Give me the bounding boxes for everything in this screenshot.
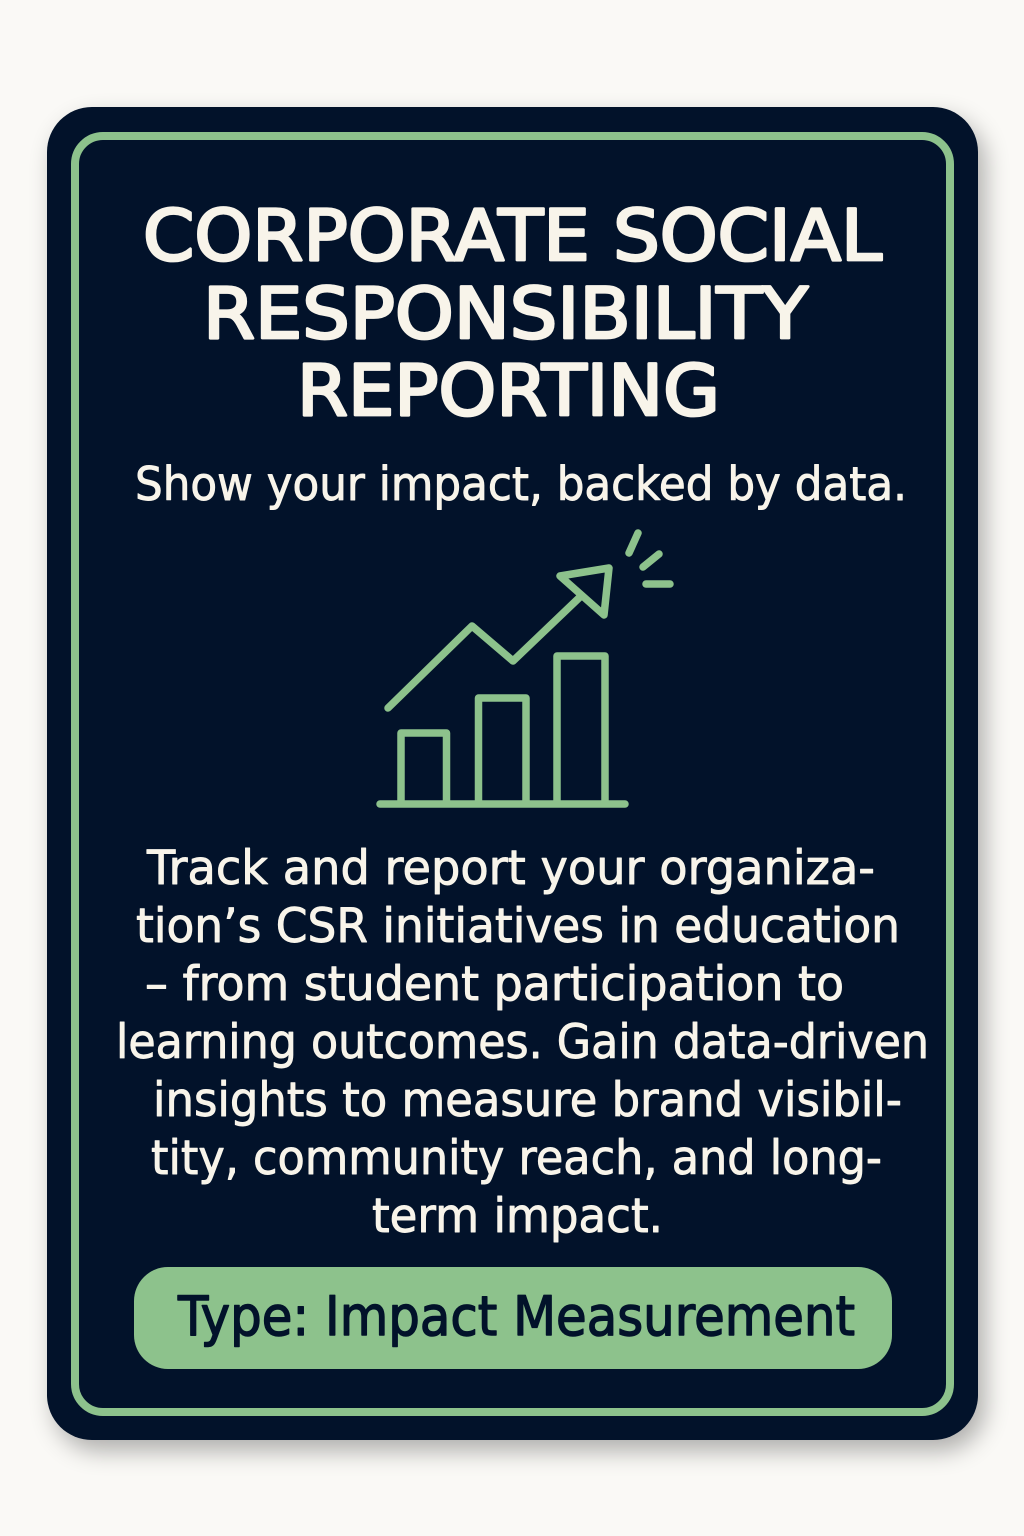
- panel: card: [47, 107, 978, 1440]
- body text: [116, 841, 929, 1244]
- badge: type: Type: Impact Measurement: [177, 1285, 855, 1348]
- title: RESPONSIBILITY: [203, 273, 808, 355]
- icon: growth chart with arrow: [380, 533, 670, 804]
- body text: tion’s CSR initiatives in education: [136, 899, 900, 954]
- badge: type: [134, 1267, 892, 1369]
- body text: insights to measure brand visibil-: [153, 1073, 902, 1128]
- title: CORPORATE SOCIAL: [143, 195, 882, 277]
- body text: – from student participation to: [145, 957, 844, 1012]
- subtitle: Show your impact, backed by data.: [135, 457, 907, 511]
- body text: Track and report your organiza-: [146, 841, 875, 896]
- title: REPORTING: [297, 350, 720, 432]
- body text: tity, community reach, and long-: [151, 1131, 882, 1186]
- body text: term impact.: [372, 1189, 663, 1244]
- body text: learning outcomes. Gain data-driven: [116, 1015, 929, 1070]
- panel: green frame: [71, 132, 954, 1416]
- title: [143, 195, 882, 432]
